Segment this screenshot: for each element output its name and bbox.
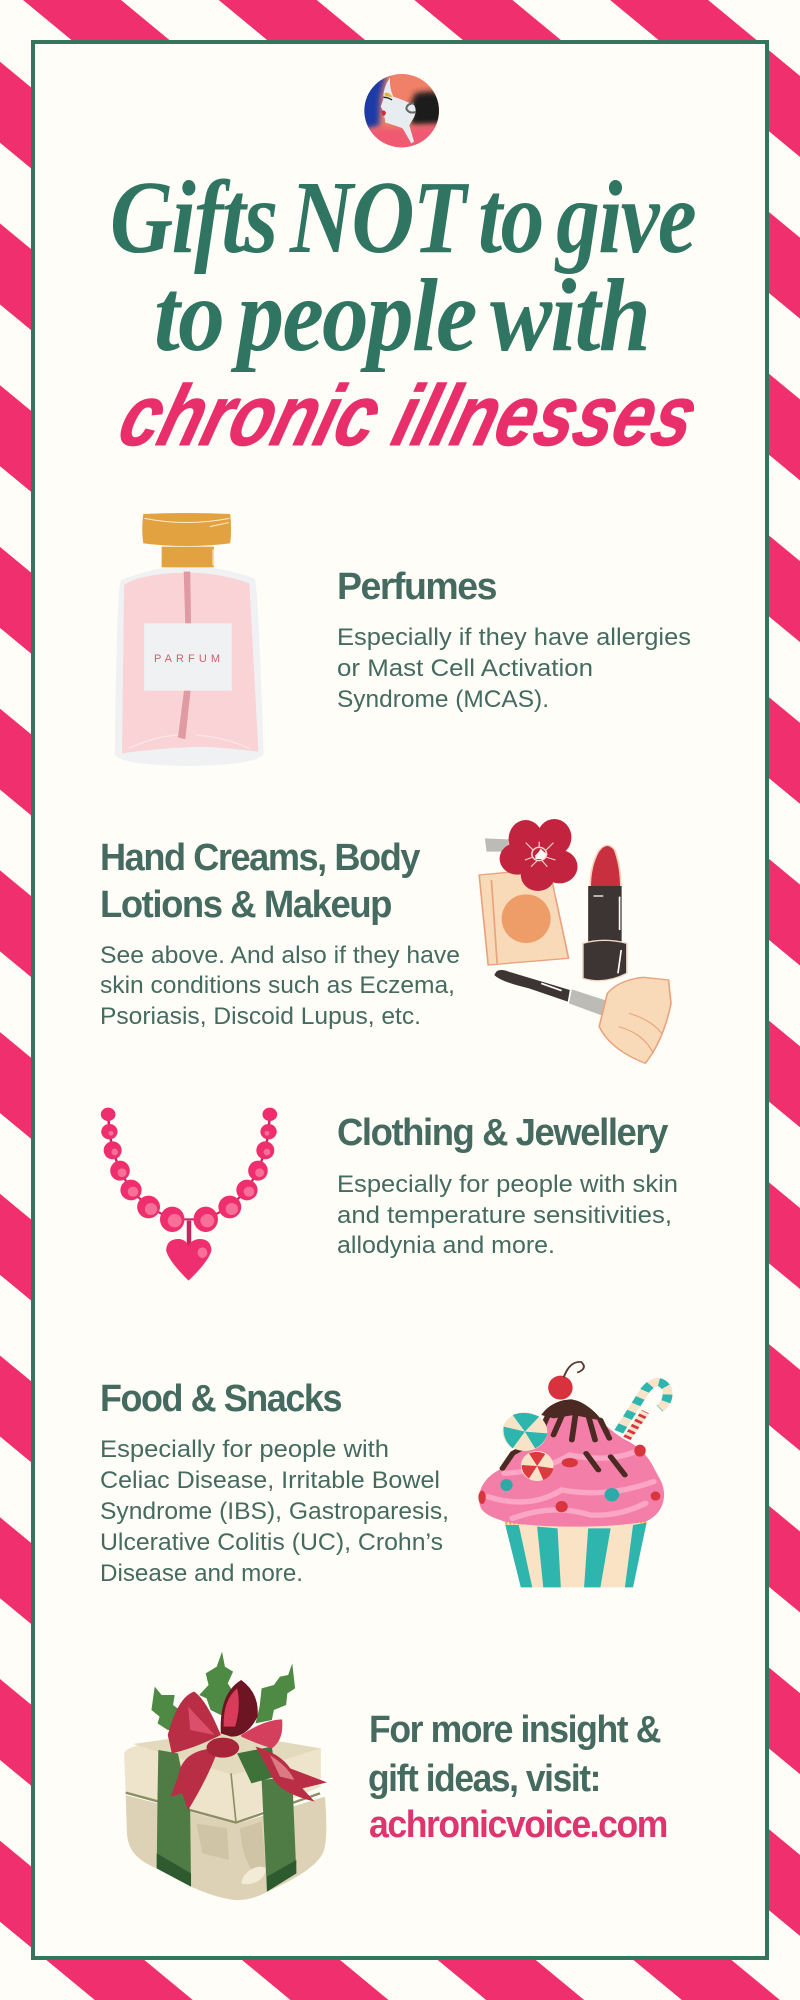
title: to people with bbox=[154, 258, 649, 373]
body text: Especially for people with skin bbox=[337, 1171, 678, 1198]
body text: Celiac Disease, Irritable Bowel bbox=[100, 1467, 440, 1494]
heading bbox=[100, 837, 420, 926]
label text: PARFUM bbox=[154, 653, 220, 665]
section: perfumes bbox=[115, 513, 691, 766]
section: food and snacks bbox=[100, 1362, 668, 1587]
section: hand creams, lotions and makeup bbox=[100, 819, 671, 1063]
heading: Food & Snacks bbox=[100, 1378, 341, 1420]
body text: Syndrome (IBS), Gastroparesis, bbox=[100, 1498, 449, 1525]
body text: allodynia and more. bbox=[337, 1232, 555, 1259]
heading: Clothing & Jewellery bbox=[337, 1112, 668, 1154]
body text: or Mast Cell Activation bbox=[337, 655, 593, 682]
icon: cupcake bbox=[478, 1362, 668, 1587]
icon: wrapped gift box with holly bbox=[124, 1652, 327, 1900]
body text bbox=[100, 1436, 449, 1587]
body text: and temperature sensitivities, bbox=[337, 1202, 672, 1229]
body text bbox=[100, 942, 460, 1030]
title: Gifts NOT to give bbox=[110, 160, 695, 275]
body text: Psoriasis, Discoid Lupus, etc. bbox=[100, 1003, 421, 1030]
title bbox=[110, 160, 708, 464]
heading: Lotions & Makeup bbox=[100, 884, 391, 926]
heading: Perfumes bbox=[337, 566, 496, 608]
logo: watercolour woman profile bbox=[364, 74, 439, 148]
body text bbox=[337, 1171, 678, 1259]
body text: skin conditions such as Eczema, bbox=[100, 972, 455, 999]
call to action text bbox=[368, 1709, 667, 1846]
icon: pink beaded necklace bbox=[101, 1108, 277, 1281]
body text: Syndrome (MCAS). bbox=[337, 686, 549, 713]
call to action text: achronicvoice.com bbox=[369, 1804, 667, 1846]
icon: makeup set bbox=[479, 819, 671, 1063]
body text: Disease and more. bbox=[100, 1560, 303, 1587]
call to action text: For more insight & bbox=[369, 1709, 661, 1751]
body text: Especially for people with bbox=[100, 1436, 389, 1463]
section: clothing and jewellery bbox=[101, 1108, 678, 1281]
body text bbox=[337, 624, 691, 713]
heading: Hand Creams, Body bbox=[100, 837, 420, 879]
body text: Especially if they have allergies bbox=[337, 624, 691, 651]
call to action text: gift ideas, visit: bbox=[368, 1758, 600, 1800]
body text: Ulcerative Colitis (UC), Crohn’s bbox=[100, 1529, 443, 1556]
section: footer call to action bbox=[124, 1652, 667, 1900]
body text: See above. And also if they have bbox=[100, 942, 460, 969]
icon: perfume bottle bbox=[115, 513, 264, 766]
